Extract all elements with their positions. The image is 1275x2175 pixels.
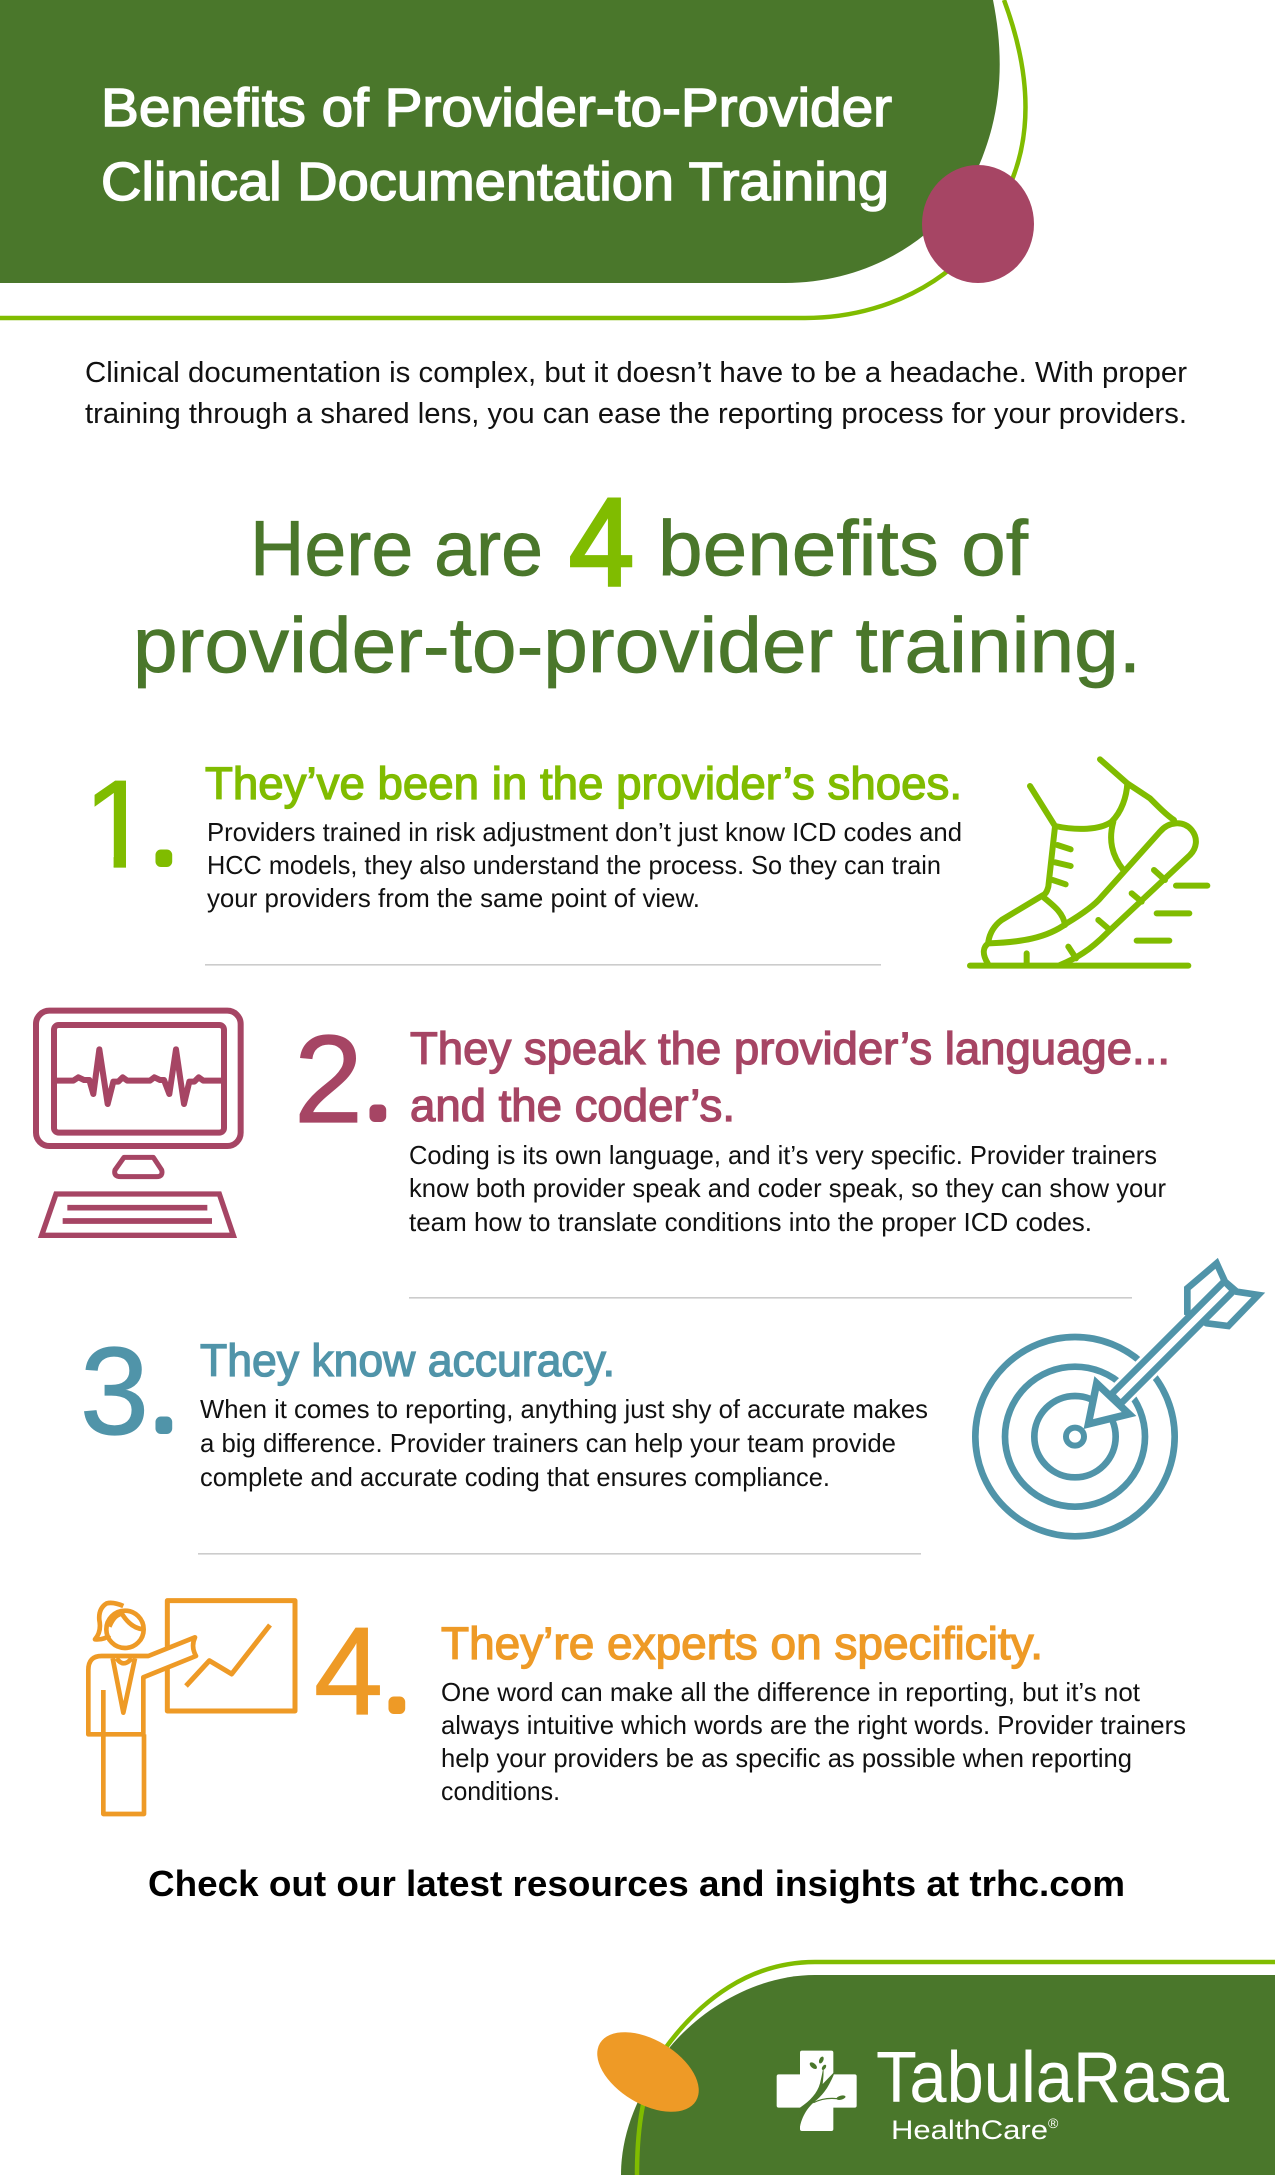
body 1: HCC models, they also understand the process. So they can train	[207, 850, 941, 880]
heading 3: They know accuracy.	[200, 1335, 615, 1386]
number 3: .	[156, 1374, 172, 1441]
body 2: know both provider speak and coder speak, so they can show your	[409, 1173, 1166, 1203]
main heading	[133, 474, 1141, 689]
body 4: help your providers be as specific as possible when reporting	[441, 1743, 1132, 1773]
logo cross mark	[777, 2051, 857, 2131]
body 3: When it comes to reporting, anything just shy of accurate makes	[200, 1394, 928, 1424]
maroon dot	[922, 165, 1034, 283]
body 3: a big difference. Provider trainers can help your team provide	[200, 1428, 896, 1458]
logo wordmark: TabulaRasa	[876, 2038, 1230, 2118]
footer banner	[584, 1962, 1275, 2175]
number 2: .	[370, 1062, 386, 1129]
heading 1: They’ve been in the provider’s shoes.	[205, 758, 962, 809]
logo wordmark: ®	[1048, 2115, 1059, 2131]
body 4: always intuitive which words are the right words. Provider trainers	[441, 1710, 1186, 1740]
number 1: .	[156, 807, 172, 874]
main heading: provider-to-provider training.	[133, 601, 1141, 689]
orange dot	[584, 2016, 712, 2128]
body 4: One word can make all the difference in reporting, but it’s not	[441, 1677, 1141, 1707]
logo	[777, 2038, 1230, 2145]
icon: computer monitor	[36, 1011, 241, 1235]
title: Clinical Documentation Training	[101, 152, 889, 212]
number 2: 2	[294, 1011, 363, 1149]
number 4: 4	[314, 1603, 383, 1741]
benefit 3	[80, 1263, 1258, 1555]
body 1	[207, 817, 962, 913]
body 4	[441, 1677, 1186, 1806]
logo wordmark: HealthCare	[891, 2115, 1048, 2145]
intro text	[85, 357, 1187, 430]
body 3: complete and accurate coding that ensures compliance.	[200, 1462, 830, 1492]
number 1	[94, 780, 172, 868]
body 1: Providers trained in risk adjustment don’t just know ICD codes and	[207, 817, 962, 847]
body 1: your providers from the same point of view.	[207, 883, 700, 913]
number 4: .	[388, 1654, 405, 1721]
benefit 1	[83, 756, 1207, 966]
heading 4: They’re experts on specificity.	[441, 1618, 1043, 1669]
icon: target and arrow	[975, 1263, 1258, 1536]
intro text: training through a shared lens, you can ease the reporting process for your providers.	[85, 398, 1187, 430]
heading 2	[410, 1023, 1170, 1131]
intro text: Clinical documentation is complex, but it doesn’t have to be a headache. With proper	[85, 357, 1187, 389]
benefit 4	[88, 1601, 1186, 1814]
body 4: conditions.	[441, 1776, 560, 1806]
benefit 2	[36, 1011, 1170, 1299]
body 2: Coding is its own language, and it’s very specific. Provider trainers	[409, 1140, 1157, 1170]
body 2: team how to translate conditions into the proper ICD codes.	[409, 1207, 1092, 1237]
icon: presenter at chart board	[88, 1601, 295, 1814]
title: Benefits of Provider-to-Provider	[101, 78, 892, 138]
number 1: 1	[83, 756, 152, 894]
main heading: benefits of	[658, 504, 1028, 592]
title	[101, 78, 892, 212]
heading 2: They speak the provider’s language...	[410, 1023, 1170, 1074]
body 3	[200, 1394, 928, 1492]
icon: running shoe	[970, 759, 1207, 966]
body 2	[409, 1140, 1166, 1237]
call to action: Check out our latest resources and insights at trhc.com	[148, 1863, 1125, 1904]
main heading: 4	[569, 474, 634, 612]
heading 2: and the coder’s.	[410, 1080, 735, 1131]
header banner	[0, 0, 1034, 318]
number 3: 3	[80, 1323, 149, 1461]
main heading: Here are	[250, 504, 543, 592]
